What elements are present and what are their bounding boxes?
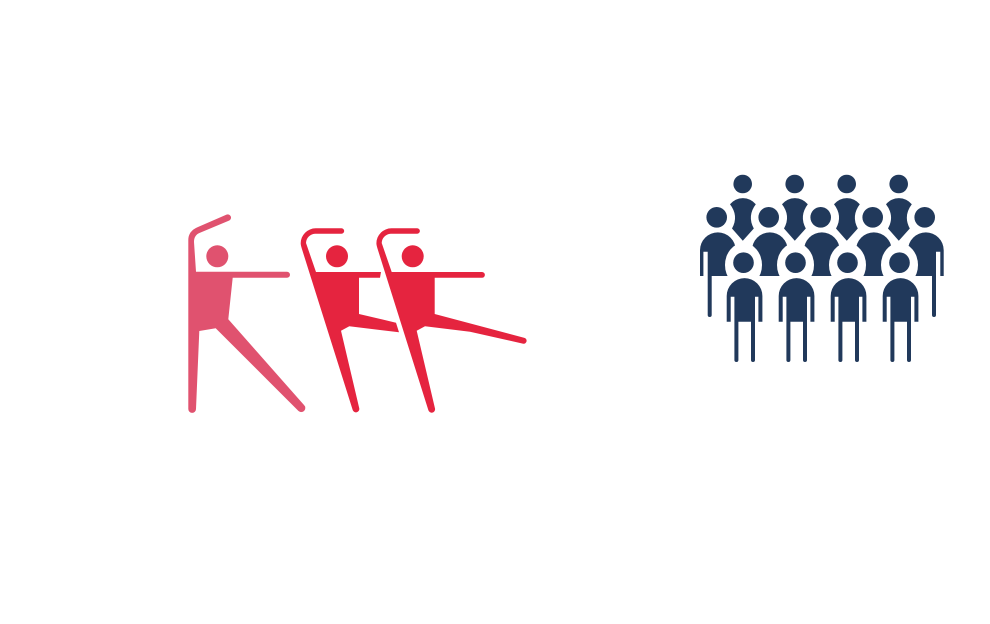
group of dancers xyxy=(188,214,527,413)
middle row of people xyxy=(700,207,944,317)
icon: red dancer front xyxy=(376,228,527,413)
icon: pink dancer xyxy=(188,214,305,413)
crowd of people xyxy=(700,175,944,362)
icon: red dancer middle xyxy=(301,228,399,412)
front row of people xyxy=(725,243,918,362)
back row of people xyxy=(730,175,912,241)
